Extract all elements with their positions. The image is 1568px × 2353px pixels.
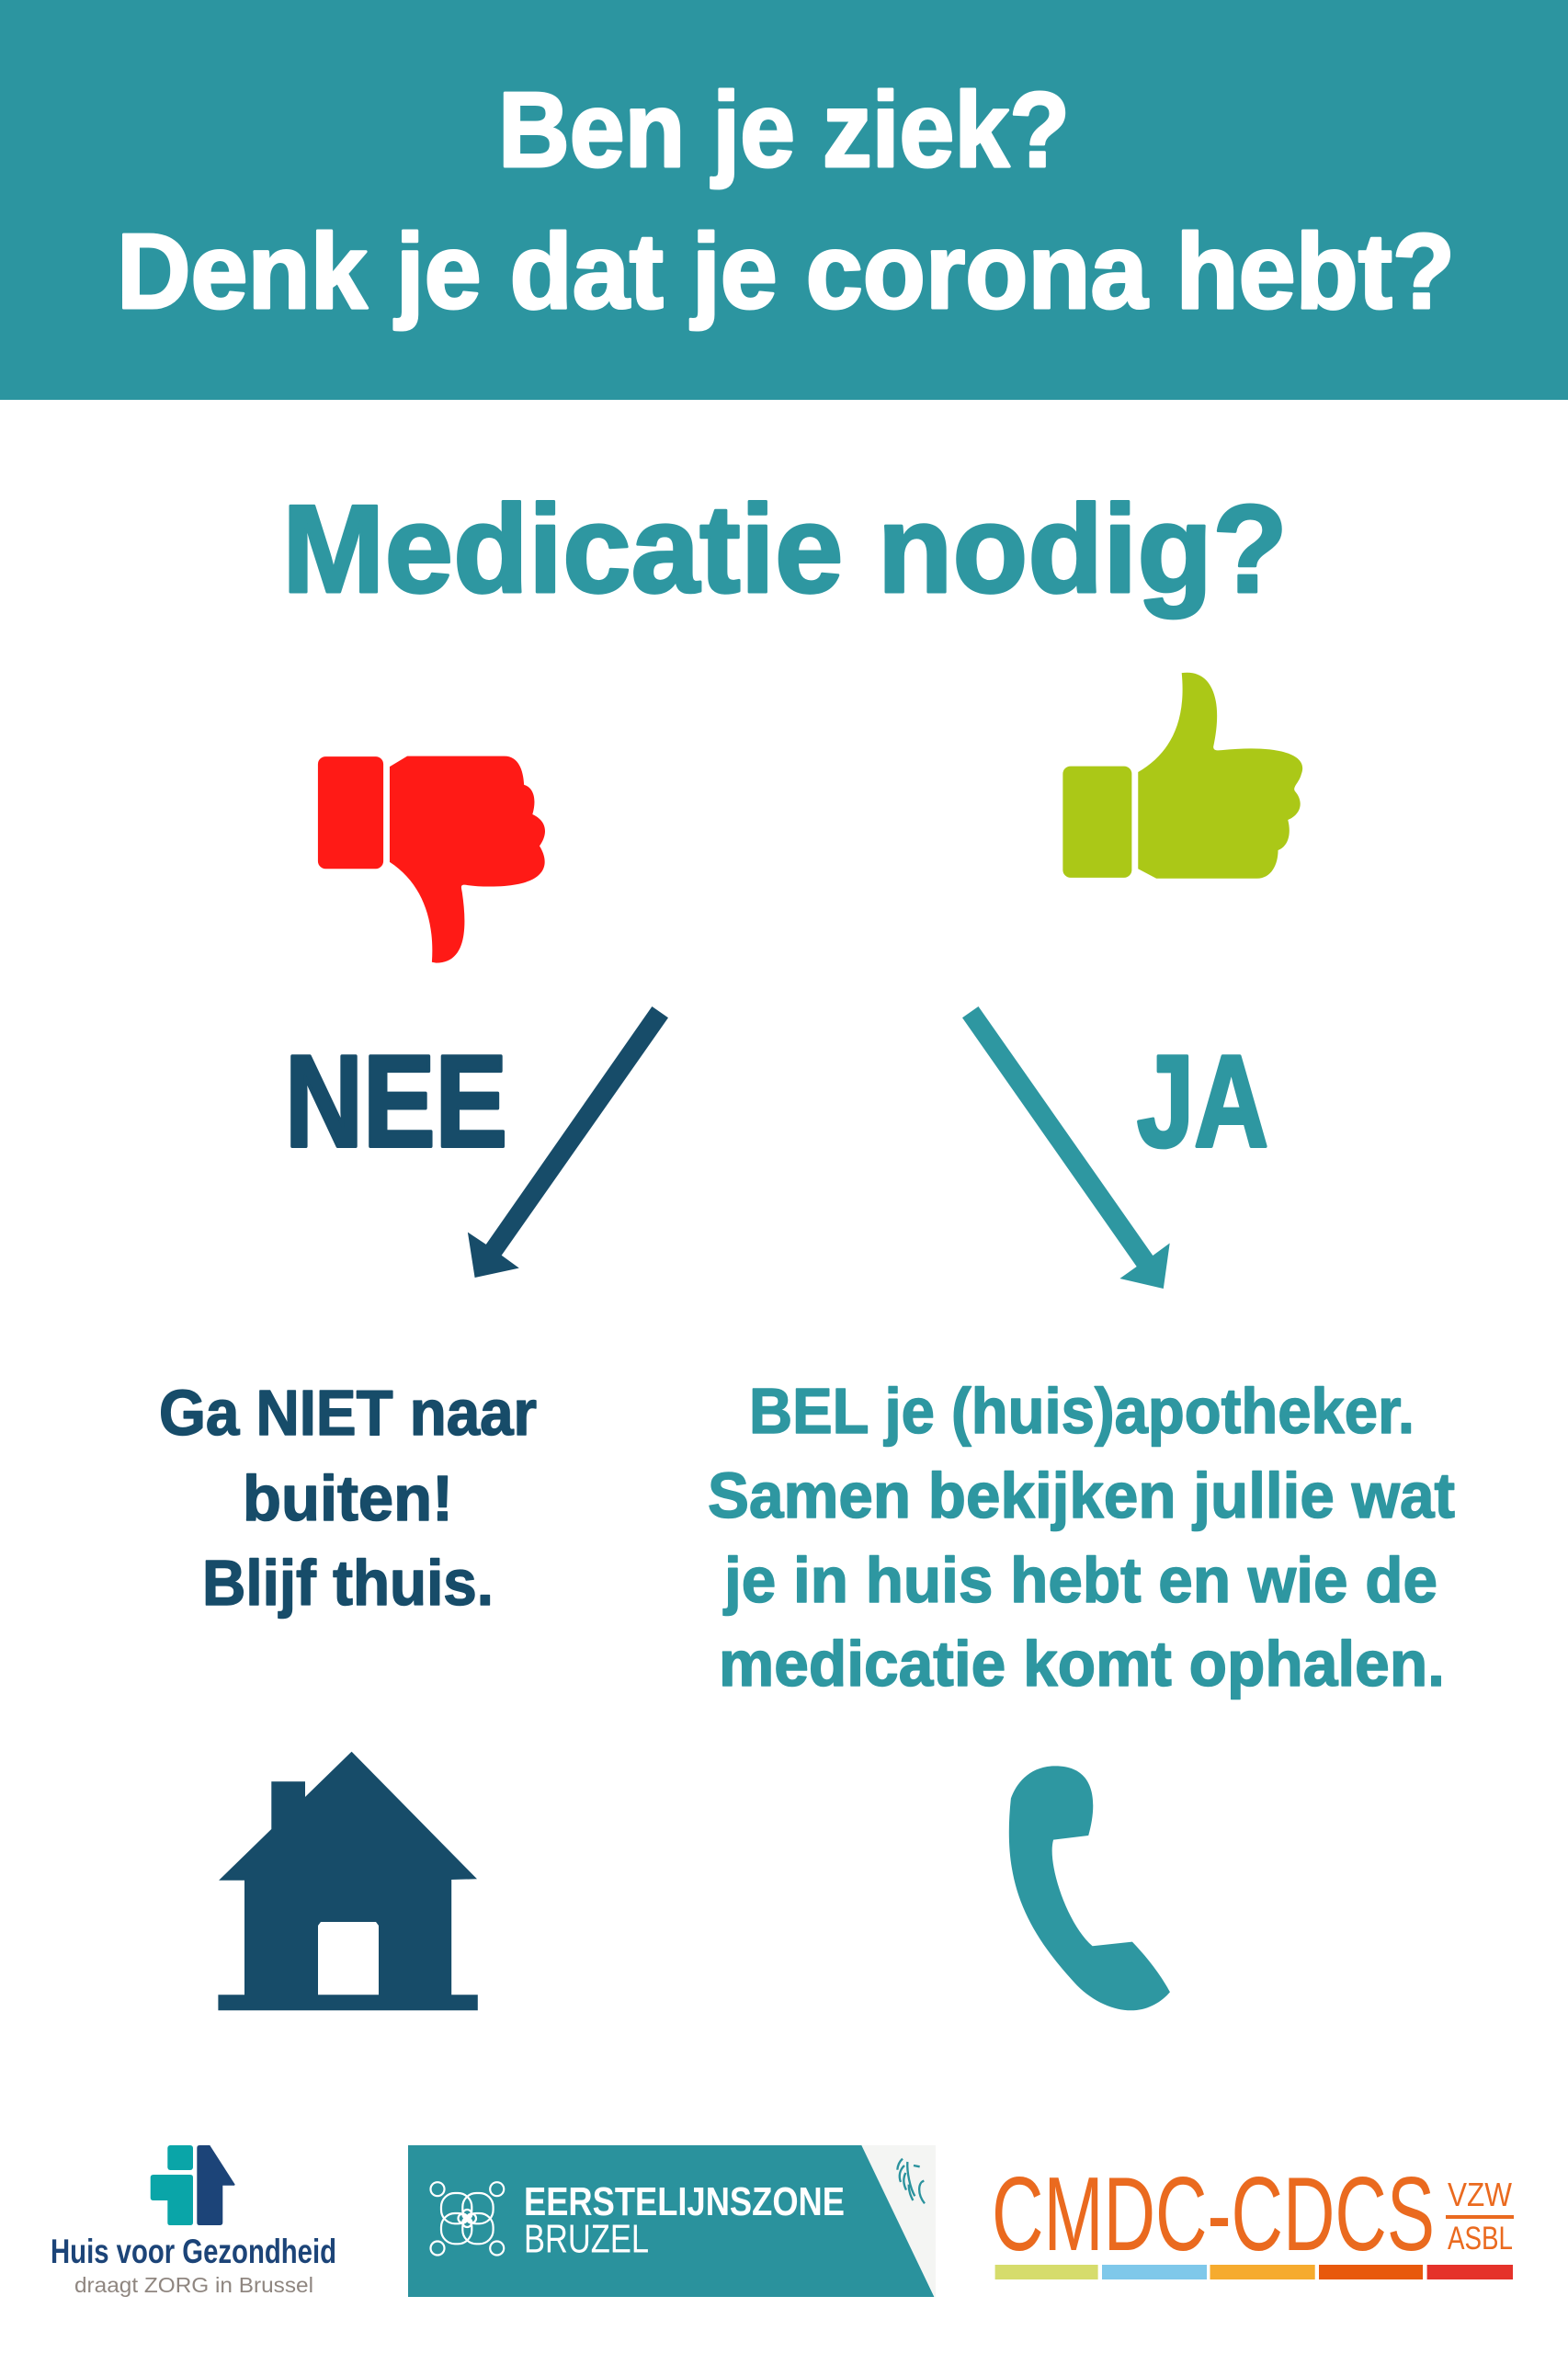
logo tagline: draagt ZORG in Brussel <box>74 2273 313 2297</box>
text block: JA advice: je in huis hebt en wie de <box>722 1544 1437 1616</box>
icon: thumbs down <box>318 756 545 963</box>
icon: thumbs up <box>1062 673 1302 879</box>
heading: Medicatie nodig: Medicatie nodig? <box>282 479 1288 619</box>
ASBL: ASBL <box>1448 2221 1513 2256</box>
logo: Eerstelijnszone Bruzel <box>408 2145 936 2297</box>
logo: Huis voor Gezondheid <box>51 2145 336 2297</box>
header title line 2: Denk je dat je corona hebt? <box>117 211 1455 331</box>
icon: telephone <box>1009 1766 1170 2010</box>
text block: JA advice: BEL je (huis)apotheker. <box>749 1375 1415 1447</box>
text block: NEE advice: buiten! <box>243 1462 453 1534</box>
VZW: VZW <box>1448 2176 1512 2213</box>
lion mark <box>897 2159 925 2203</box>
brand name: EERSTELIJNSZONE <box>524 2179 845 2224</box>
text block: JA advice: Samen bekijken jullie wat <box>708 1460 1455 1531</box>
text block: JA advice: medicatie komt ophalen. <box>719 1628 1445 1699</box>
brand sub name: BRUZEL <box>524 2217 649 2261</box>
label: JA: JA <box>1137 1029 1268 1175</box>
logo name: Huis voor Gezondheid <box>51 2233 336 2270</box>
icon: house <box>218 1752 478 2010</box>
text block: JA advice <box>708 1375 1455 1699</box>
logo icon: cross and house <box>151 2145 235 2225</box>
text block: NEE advice: Ga NIET naar <box>159 1377 537 1449</box>
logo: CMDC-CDCS <box>992 2156 1514 2279</box>
arrow: NEE <box>468 1006 668 1278</box>
arrow: JA <box>962 1006 1170 1289</box>
text block: NEE advice: Blijf thuis. <box>202 1547 494 1619</box>
colour bars <box>995 2265 1513 2279</box>
network icon <box>430 2182 504 2256</box>
header title line 1: Ben je ziek? <box>498 70 1070 189</box>
header banner <box>0 0 1568 400</box>
label: NEE: NEE <box>285 1029 507 1175</box>
text block: NEE advice <box>159 1377 537 1619</box>
